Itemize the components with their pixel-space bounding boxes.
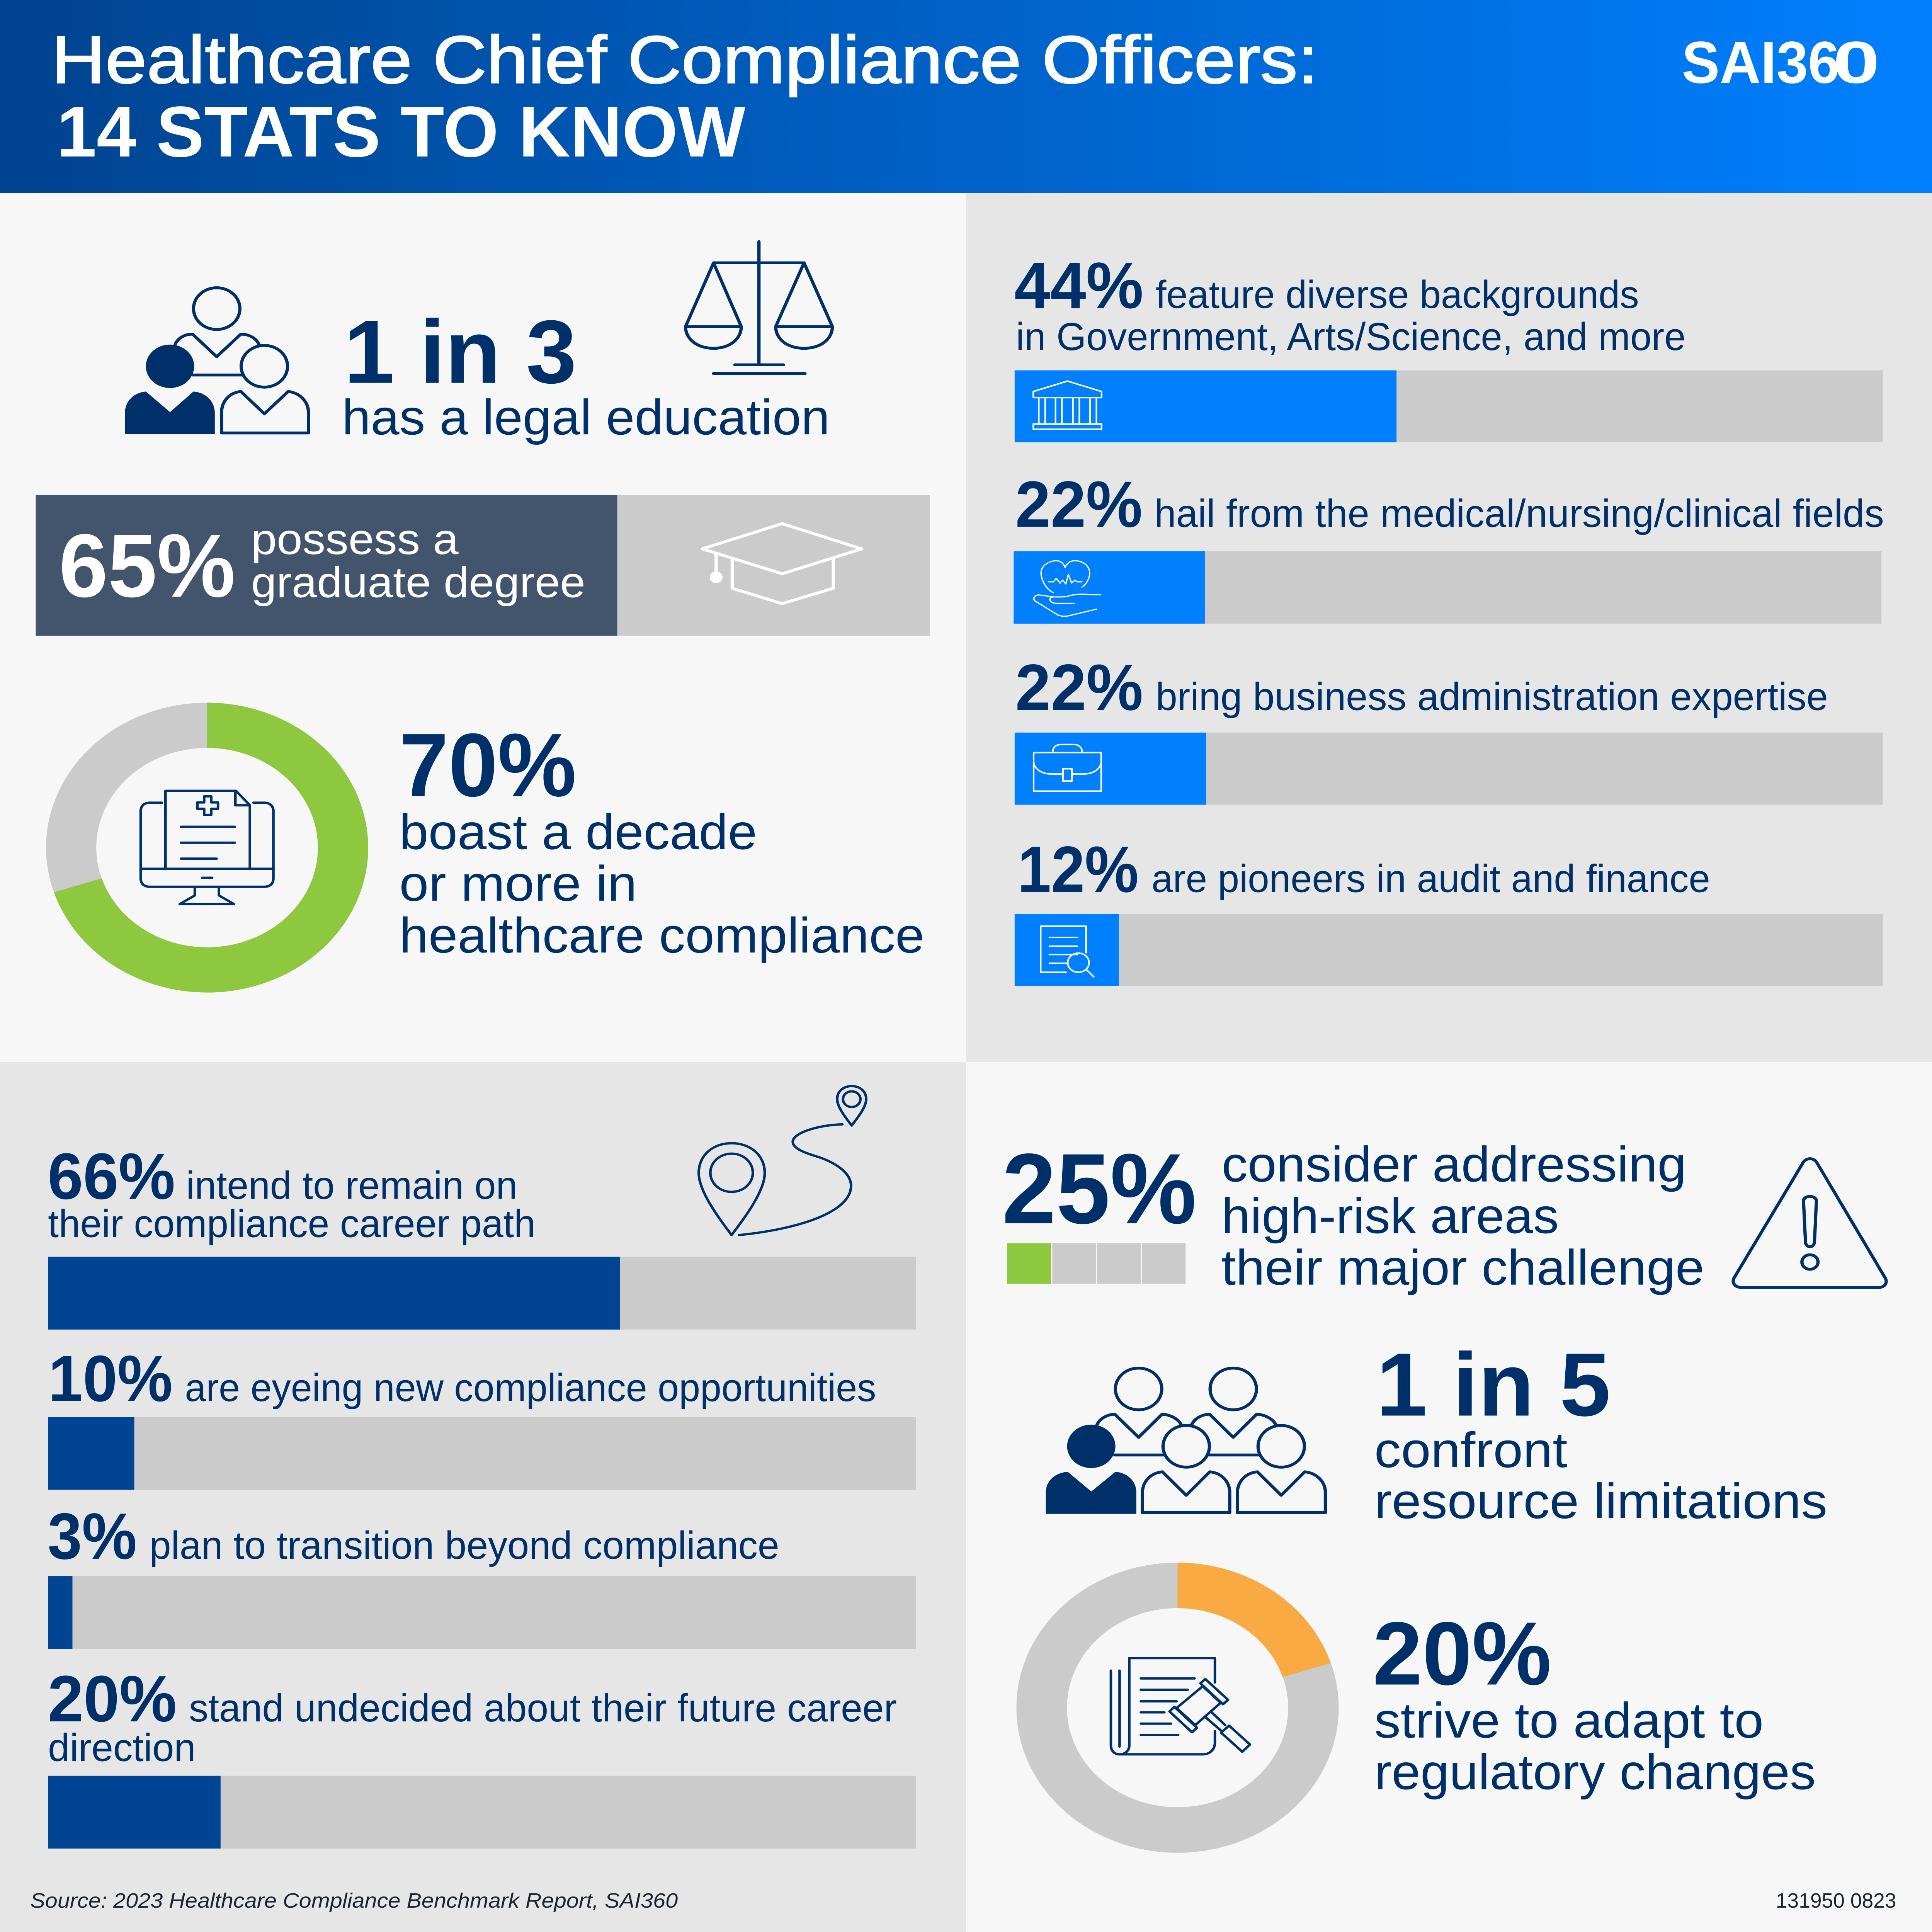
stat: 1 in 3: 1 in 3 xyxy=(344,302,577,402)
bar: 10% xyxy=(48,1417,916,1490)
text: intend to remain xyxy=(48,1163,536,1245)
stat: 25%: 25% xyxy=(1002,1133,1197,1244)
text: diverse backgrounds: in Government, Arts/Science, and more xyxy=(1016,315,1685,359)
icon: monitor with medical document xyxy=(141,791,274,904)
stat: 44%: 44% xyxy=(1014,249,1143,322)
logo: SAI360: SAI36 xyxy=(1682,29,1840,96)
text: possess a graduate degree: graduate degree xyxy=(251,558,585,607)
stat: 22% business: 22% xyxy=(1015,651,1143,724)
icon: document with magnifier xyxy=(1041,926,1094,977)
header banner xyxy=(0,0,1932,193)
panel: legal education, degrees, experience xyxy=(0,193,966,1062)
stat: 1 in 5: 1 in 5 xyxy=(1376,1335,1611,1435)
bar: 20% xyxy=(48,1776,916,1849)
text: boast a decade or more in healthcare compliance xyxy=(399,804,924,963)
text: diverse backgrounds: feature diverse backgrounds xyxy=(1156,272,1639,316)
text: confront resource limitations: confront xyxy=(1374,1422,1568,1478)
stat: 12%: 12% xyxy=(1017,833,1139,906)
text: boast a decade or more in healthcare compliance: boast a decade xyxy=(399,804,757,860)
text: confront resource limitations xyxy=(1374,1422,1827,1529)
text: undecided: stand undecided about their future career xyxy=(189,1686,897,1730)
text: has a legal education: has a legal education xyxy=(342,389,830,445)
icon: heart in hand xyxy=(1034,561,1100,616)
stat: 20% undecided: 20% xyxy=(48,1662,177,1735)
source note: Source: 2023 Healthcare Compliance Benchmark Report, SAI360 xyxy=(30,1889,678,1912)
stat: 70%: 70% xyxy=(399,715,577,815)
text: regulatory changes xyxy=(1374,1692,1816,1800)
bar: 65% graduate degree xyxy=(36,495,930,636)
text: high-risk areas challenge: consider addressing xyxy=(1222,1136,1686,1192)
icon: briefcase xyxy=(1034,745,1101,791)
text: high-risk areas challenge: high-risk areas xyxy=(1222,1188,1559,1244)
text: possess a graduate degree xyxy=(251,515,585,607)
icon: five people xyxy=(1046,1368,1325,1514)
bar: 44% xyxy=(1015,370,1883,442)
stat: 22% medical: 22% xyxy=(1015,468,1143,541)
text: intend to remain: their compliance career path xyxy=(48,1202,536,1245)
pictogram: one in four squares xyxy=(1007,1243,1185,1284)
text: audit and finance: are pioneers in audit and finance xyxy=(1151,857,1710,900)
text: intend to remain: intend to remain on xyxy=(186,1163,517,1207)
bar: 22% medical xyxy=(1014,551,1881,624)
text: diverse backgrounds xyxy=(1016,272,1685,359)
icon: document and gavel xyxy=(1111,1658,1250,1754)
stat: 66%: 66% xyxy=(48,1139,175,1213)
donut chart: 70% xyxy=(71,725,343,970)
icon: warning triangle xyxy=(1733,1159,1886,1287)
icon: government building xyxy=(1033,381,1102,429)
bar: 3% xyxy=(48,1576,916,1649)
stat: 10%: 10% xyxy=(48,1342,173,1415)
text: boast a decade or more in healthcare compliance: healthcare compliance xyxy=(399,908,925,963)
bar: 22% business xyxy=(1015,733,1883,805)
icon: route between map pins xyxy=(699,1086,866,1235)
stat: 3%: 3% xyxy=(48,1500,137,1573)
text: boast a decade or more in healthcare compliance: or more in xyxy=(399,856,637,911)
title xyxy=(51,22,1318,172)
job code: 131950 0823 xyxy=(1776,1889,1896,1912)
text: confront resource limitations: resource limitations xyxy=(1374,1473,1827,1529)
icon: scales xyxy=(685,242,832,374)
panel: backgrounds xyxy=(966,193,1932,1062)
text: high-risk areas challenge: their major challenge xyxy=(1221,1240,1704,1295)
text: undecided xyxy=(48,1686,897,1769)
stat: 65%: 65% xyxy=(59,516,235,616)
text: business administration: bring business administration expertise xyxy=(1156,675,1828,718)
logo: SAI360: 0 xyxy=(1833,29,1880,96)
text: regulatory changes: strive to adapt to xyxy=(1374,1692,1764,1748)
text: possess a graduate degree: possess a xyxy=(251,515,459,564)
donut chart: 20% xyxy=(1042,1585,1313,1830)
bar: 12% xyxy=(1015,914,1883,986)
text: new opportunities: are eyeing new compliance opportunities xyxy=(185,1366,876,1410)
icon: three people xyxy=(125,288,308,434)
title: Healthcare Chief Compliance Officers: xyxy=(51,22,1318,97)
panel: career plans xyxy=(0,1062,966,1932)
panel: challenges xyxy=(966,1062,1932,1932)
title: 14 STATS TO KNOW xyxy=(57,92,746,172)
icon: graduation cap xyxy=(702,524,862,604)
stat: 20% regulatory: 20% xyxy=(1372,1604,1551,1704)
bar: 66% xyxy=(48,1257,916,1330)
text: high-risk areas challenge xyxy=(1221,1136,1704,1295)
text: regulatory changes: regulatory changes xyxy=(1374,1744,1816,1800)
text: beyond compliance: plan to transition beyond compliance xyxy=(150,1523,779,1567)
text: undecided: direction xyxy=(48,1726,196,1769)
